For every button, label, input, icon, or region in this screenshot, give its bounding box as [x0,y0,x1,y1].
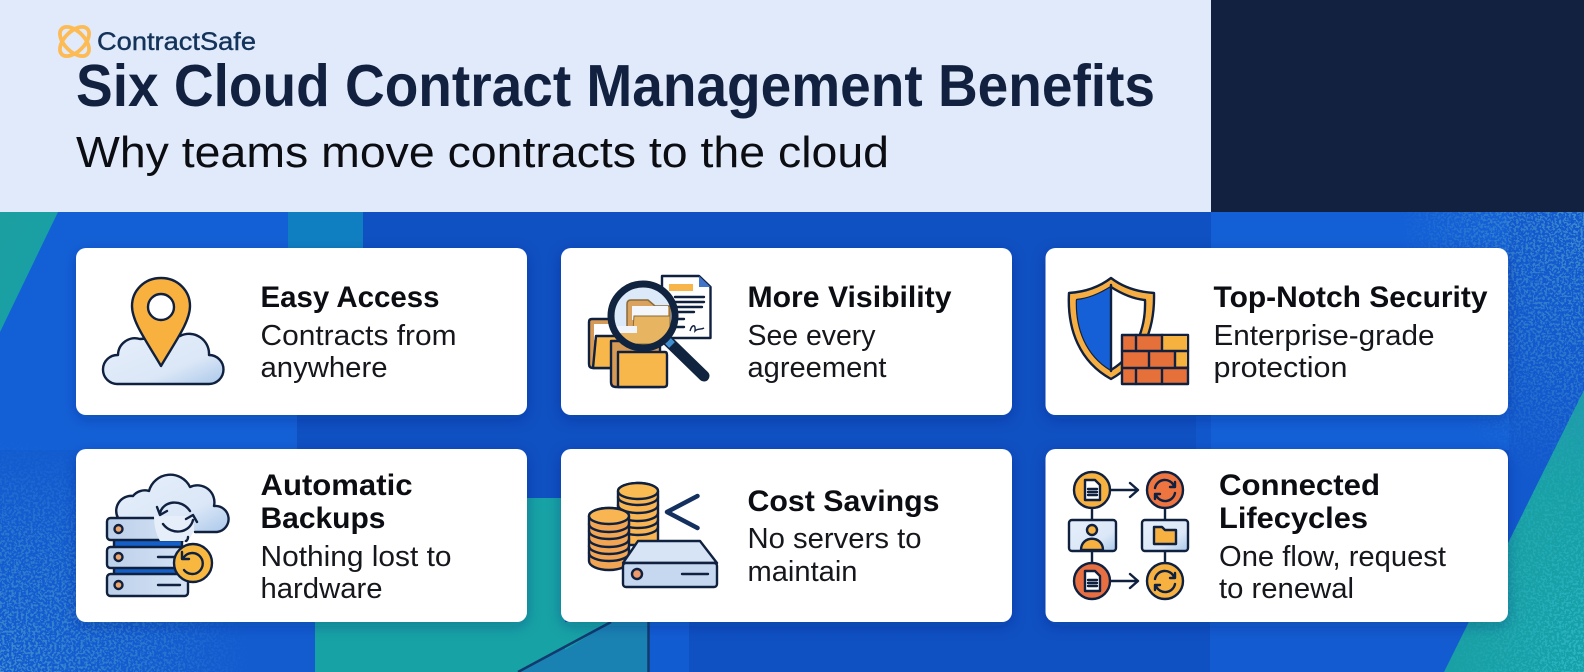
description: protection [1214,352,1348,384]
card: Automatic Backups [76,449,527,622]
header band [0,0,1211,212]
heading [1219,469,1380,535]
description [260,320,456,384]
dark corner panel [1211,0,1584,212]
icon: coin stacks less than server [589,483,717,587]
background: geometric blue and teal panels [0,212,1584,672]
heading: More Visibility [748,281,952,314]
heading: Backups [260,502,386,535]
heading: Automatic [260,469,412,502]
logo: ContractSafe: ContractSafe [97,28,256,56]
description: No servers to [748,523,922,555]
description: agreement [748,352,887,384]
card: Easy Access [76,248,527,415]
heading: Easy Access [260,281,440,314]
card: Top-Notch Security [1046,248,1508,415]
description: See every [748,320,876,352]
description: anywhere [260,352,388,384]
description: Enterprise-grade [1214,320,1434,352]
heading [260,469,412,535]
heading: Lifecycles [1219,502,1368,535]
description [1214,320,1434,384]
description: Contracts from [260,320,456,352]
description: Nothing lost to [260,541,452,573]
description [748,320,887,384]
card: More Visibility [561,248,1012,415]
icon: cloud sync with server rack [107,475,229,596]
description: maintain [748,556,858,588]
icon: shield and brick wall [1069,278,1188,384]
icon: map pin on cloud [103,278,223,384]
logo: ContractSafe [55,22,256,61]
icon: lifecycle flow diagram [1069,472,1188,599]
card: Cost Savings [561,449,1012,622]
description [1219,541,1446,605]
heading: Top-Notch Security [1214,281,1488,314]
subtitle: Why teams move contracts to the cloud [76,128,889,177]
description [748,523,922,588]
description [260,541,452,605]
heading: Connected [1219,469,1380,502]
card: Connected Lifecycles [1046,449,1508,622]
description: One flow, request [1219,541,1446,573]
title: Six Cloud Contract Management Benefits [76,53,1155,119]
icon: folders under magnifier with document [589,276,710,387]
description: hardware [260,573,382,605]
heading: Cost Savings [748,485,940,518]
description: to renewal [1219,573,1354,605]
